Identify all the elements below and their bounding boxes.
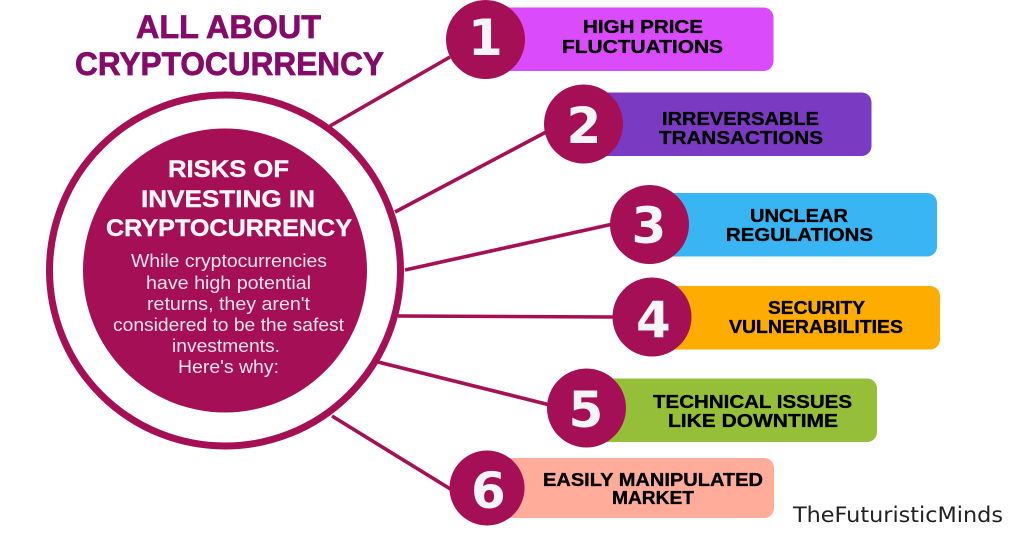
- item 2: irreversable transactions: 2: [566, 97, 601, 155]
- hub description: While cryptocurrencies: [131, 251, 327, 271]
- hub inner disc: [83, 128, 367, 412]
- item 1: high price fluctuations: HIGH PRICE: [583, 16, 703, 37]
- hub description: [113, 251, 344, 377]
- hub heading: [106, 156, 352, 242]
- hub description: investments.: [172, 336, 280, 356]
- item 3: unclear regulations: UNCLEAR: [750, 205, 848, 226]
- item 5: technical issues like downtime: [547, 368, 877, 448]
- central hub: risks of investing: [50, 95, 400, 446]
- item 3: unclear regulations: [610, 185, 937, 264]
- item 1: high price fluctuations: [446, 0, 774, 79]
- item 2: irreversable transactions: IRREVERSABLE: [662, 108, 819, 129]
- hub heading: CRYPTOCURRENCY: [106, 215, 352, 242]
- watermark credit: TheFuturisticMinds: [792, 503, 1003, 527]
- item 5: technical issues like downtime: TECHNICAL ISSUES: [653, 391, 852, 412]
- item 6: easily manipulated market: [450, 450, 774, 526]
- title: [75, 9, 384, 82]
- item 4: security vulnerabilities: SECURITY: [768, 297, 866, 318]
- item 5: technical issues like downtime: 5: [568, 381, 603, 439]
- item 6: easily manipulated market: MARKET: [612, 487, 695, 508]
- item 3: unclear regulations: 3: [632, 197, 666, 255]
- item 2: irreversable transactions: [544, 84, 872, 164]
- item 6: easily manipulated market: EASILY MANIPULATED: [543, 469, 763, 490]
- hub description: returns, they aren't: [147, 294, 310, 314]
- item 2: irreversable transactions: TRANSACTIONS: [659, 127, 823, 148]
- item 3: unclear regulations: REGULATIONS: [726, 224, 873, 245]
- hub description: Here's why:: [178, 357, 279, 377]
- item 4: security vulnerabilities: VULNERABILITIES: [729, 316, 903, 337]
- title: ALL ABOUT: [136, 9, 321, 45]
- item 5: technical issues like downtime: LIKE DOWNTIME: [668, 410, 838, 431]
- hub description: have high potential: [146, 273, 311, 293]
- hub description: considered to be the safest: [113, 315, 344, 335]
- hub heading: INVESTING IN: [141, 186, 315, 213]
- connector lines from hub to numbered items: [330, 57, 615, 490]
- item 4: security vulnerabilities: 4: [636, 291, 671, 349]
- item 1: high price fluctuations: FLUCTUATIONS: [562, 36, 723, 57]
- item 1: high price fluctuations: 1: [468, 9, 503, 67]
- hub outer ring: [50, 95, 400, 446]
- hub heading: RISKS OF: [168, 156, 289, 183]
- title: CRYPTOCURRENCY: [75, 46, 384, 82]
- item 4: security vulnerabilities: [612, 278, 940, 356]
- item 6: easily manipulated market: 6: [471, 462, 506, 520]
